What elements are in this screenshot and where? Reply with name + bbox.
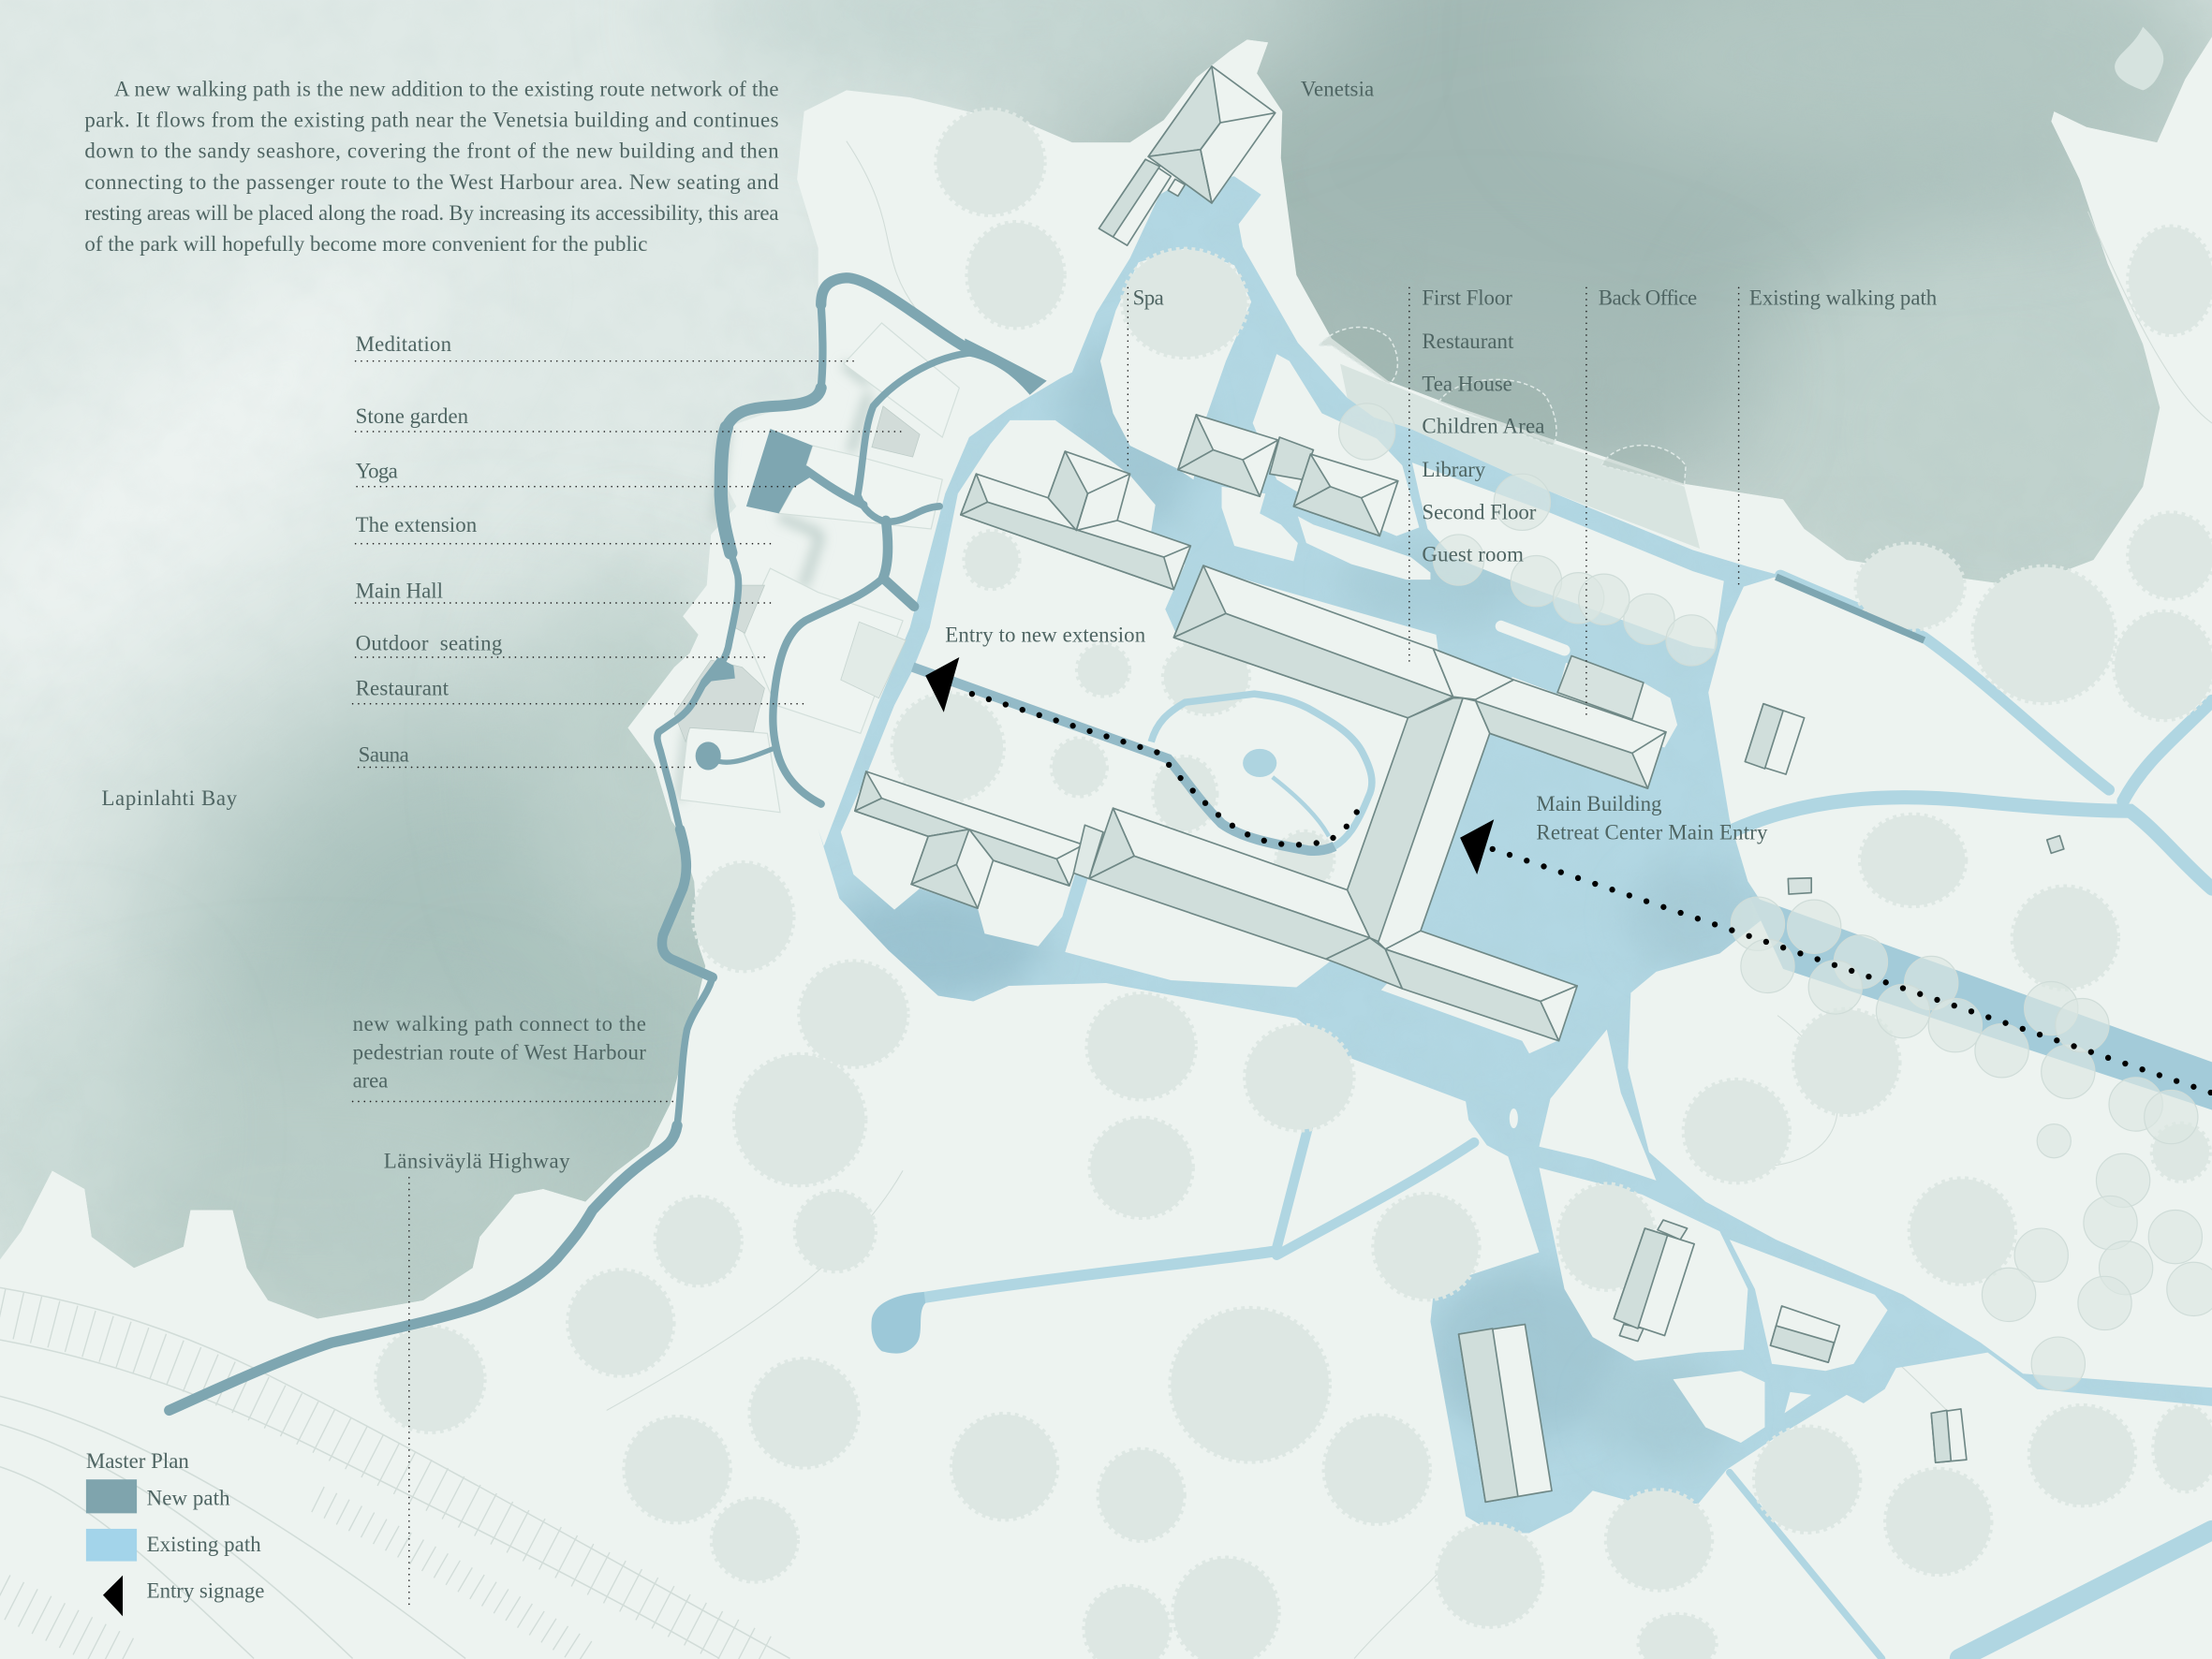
- labels: left leaders: Main Hall: [356, 580, 443, 603]
- pond: [1243, 749, 1276, 777]
- label: main building entry: [1536, 792, 1768, 844]
- label: West Harbour connection: pedestrian route of West Harbour: [353, 1040, 646, 1064]
- label: Venetsia: Venetsia: [1301, 77, 1374, 100]
- label: entry to new extension: Entry to new extension: [945, 623, 1146, 646]
- building: east lawn house: [1745, 704, 1805, 774]
- labels: top leaders: [1128, 286, 1938, 716]
- small kiosks: [1788, 836, 2064, 894]
- new path: sauna drop: [696, 741, 721, 771]
- labels: left leaders: [353, 332, 906, 767]
- labels: top leaders: Spa: [1133, 286, 1164, 309]
- labels: top leaders: Back Office: [1599, 286, 1697, 309]
- labels: left leaders: Stone garden: [356, 404, 469, 428]
- intro paragraph: A new walking path is the new addition to the existing route network of the: [114, 77, 779, 100]
- labels: top leaders: Tea House: [1422, 372, 1512, 395]
- water: bay and sea wash: [0, 0, 2212, 1318]
- intro paragraph: resting areas will be placed along the road. By increasing its accessibility, this area: [84, 201, 779, 225]
- labels: left leaders: Restaurant: [356, 677, 450, 700]
- building: north-west wing: [961, 451, 1190, 590]
- labels: left leaders: Meditation: [356, 332, 452, 356]
- arrow: main entry: [1460, 819, 1494, 874]
- intro paragraph: connecting to the passenger route to the West Harbour area. New seating and: [84, 170, 779, 194]
- legend: Entry signage: [147, 1579, 264, 1603]
- building: north wing: [1173, 565, 1513, 718]
- legend: New path: [147, 1486, 230, 1509]
- pond stem: [1273, 777, 1329, 836]
- building: south wing: [1089, 808, 1402, 989]
- labels: top leaders: Library: [1422, 458, 1486, 481]
- label: West Harbour connection: [353, 1012, 674, 1102]
- label: highway: Länsiväylä Highway: [384, 1149, 570, 1172]
- legend: Existing path: [147, 1533, 261, 1556]
- existing path network: [818, 176, 2212, 1659]
- existing path: main plaza and courtyards: [818, 176, 2212, 1533]
- building: first floor pavilion left: [1178, 415, 1278, 496]
- intro paragraph: of the park will hopefully become more convenient for the public: [84, 232, 647, 256]
- label: main building entry: Main Building: [1536, 792, 1662, 815]
- building: central spine: [1348, 698, 1490, 949]
- intro paragraph: [84, 77, 779, 256]
- buildings: [855, 66, 2064, 1502]
- building: south-west wing: [855, 771, 1103, 908]
- existing path: outer roads: [924, 576, 2212, 1659]
- label: main building entry: Retreat Center Main Entry: [1536, 820, 1768, 844]
- building: first floor pavilion right: [1293, 454, 1398, 536]
- building: large south hall: [1459, 1325, 1552, 1502]
- pale shore strip: [1340, 364, 1700, 549]
- labels: top leaders: First Floor: [1422, 286, 1512, 309]
- existing path: north-east avenue: [1749, 896, 2212, 1110]
- labels: top leaders: Second Floor: [1422, 500, 1537, 523]
- intro paragraph: park. It flows from the existing path near the Venetsia building and continues: [84, 109, 779, 132]
- label: West Harbour connection: area: [353, 1068, 388, 1092]
- labels: left leaders: The extension: [356, 513, 478, 536]
- dotted walking route: main entry: [1493, 849, 2212, 1093]
- new path: north-east section: [1777, 577, 1924, 640]
- round trees along avenue and east lawn: [1339, 404, 2212, 1390]
- existing path: west road end pool: [871, 1292, 925, 1354]
- label: West Harbour connection: new walking path connect to the: [353, 1012, 646, 1035]
- dotted walking route: extension: [972, 694, 1362, 844]
- arrow: entry to new extension: [925, 657, 959, 712]
- trees: [376, 110, 2212, 1659]
- labels: left leaders: Yoga: [356, 460, 398, 483]
- lawns between paths: [841, 248, 1888, 1443]
- building: east wing: [1476, 680, 1666, 788]
- building: pavilion link: [1270, 437, 1313, 479]
- island in the sea: [2115, 27, 2163, 90]
- outdoor seating striped panel: [841, 622, 906, 698]
- building: south house: [1614, 1220, 1694, 1342]
- building: Venetia: [1099, 66, 1276, 245]
- entry path: [913, 668, 1335, 851]
- label: Lapinlahti Bay: Lapinlahti Bay: [101, 786, 238, 810]
- site footprint panels: [680, 323, 959, 813]
- courtyard ring path: [1151, 694, 1372, 846]
- labels: left leaders: Sauna: [359, 742, 409, 766]
- labels: left leaders: Outdoor seating: [356, 631, 502, 654]
- building: pavilion south: [1771, 1306, 1839, 1362]
- new path: outdoor seating pool: [693, 657, 735, 697]
- labels: top leaders: Restaurant: [1422, 330, 1514, 353]
- labels: top leaders: Guest room: [1422, 543, 1524, 566]
- tree canopy outlines over the north shore water: [1319, 327, 1686, 485]
- courtyard paths: [913, 668, 1372, 851]
- legend: [86, 1449, 264, 1616]
- new path network: [170, 278, 1924, 1410]
- building: south-east wing: [1385, 931, 1577, 1041]
- legend: Master Plan: [86, 1449, 189, 1473]
- new path: north junction with existing path: [965, 339, 1047, 395]
- new extension site: [674, 323, 959, 813]
- stone gardens: [674, 406, 920, 741]
- new path: main walking route: [170, 278, 973, 1410]
- intro paragraph: down to the sandy seashore, covering the front of the new building and then: [84, 139, 779, 163]
- panel shadows: [680, 364, 869, 800]
- new path: yoga plaza: [746, 429, 813, 513]
- building: back office: [1557, 655, 1644, 719]
- labels: top leaders: Children Area: [1422, 414, 1544, 437]
- labels: top leaders: Existing walking path: [1749, 286, 1938, 309]
- building: south-east cabin: [1931, 1409, 1967, 1462]
